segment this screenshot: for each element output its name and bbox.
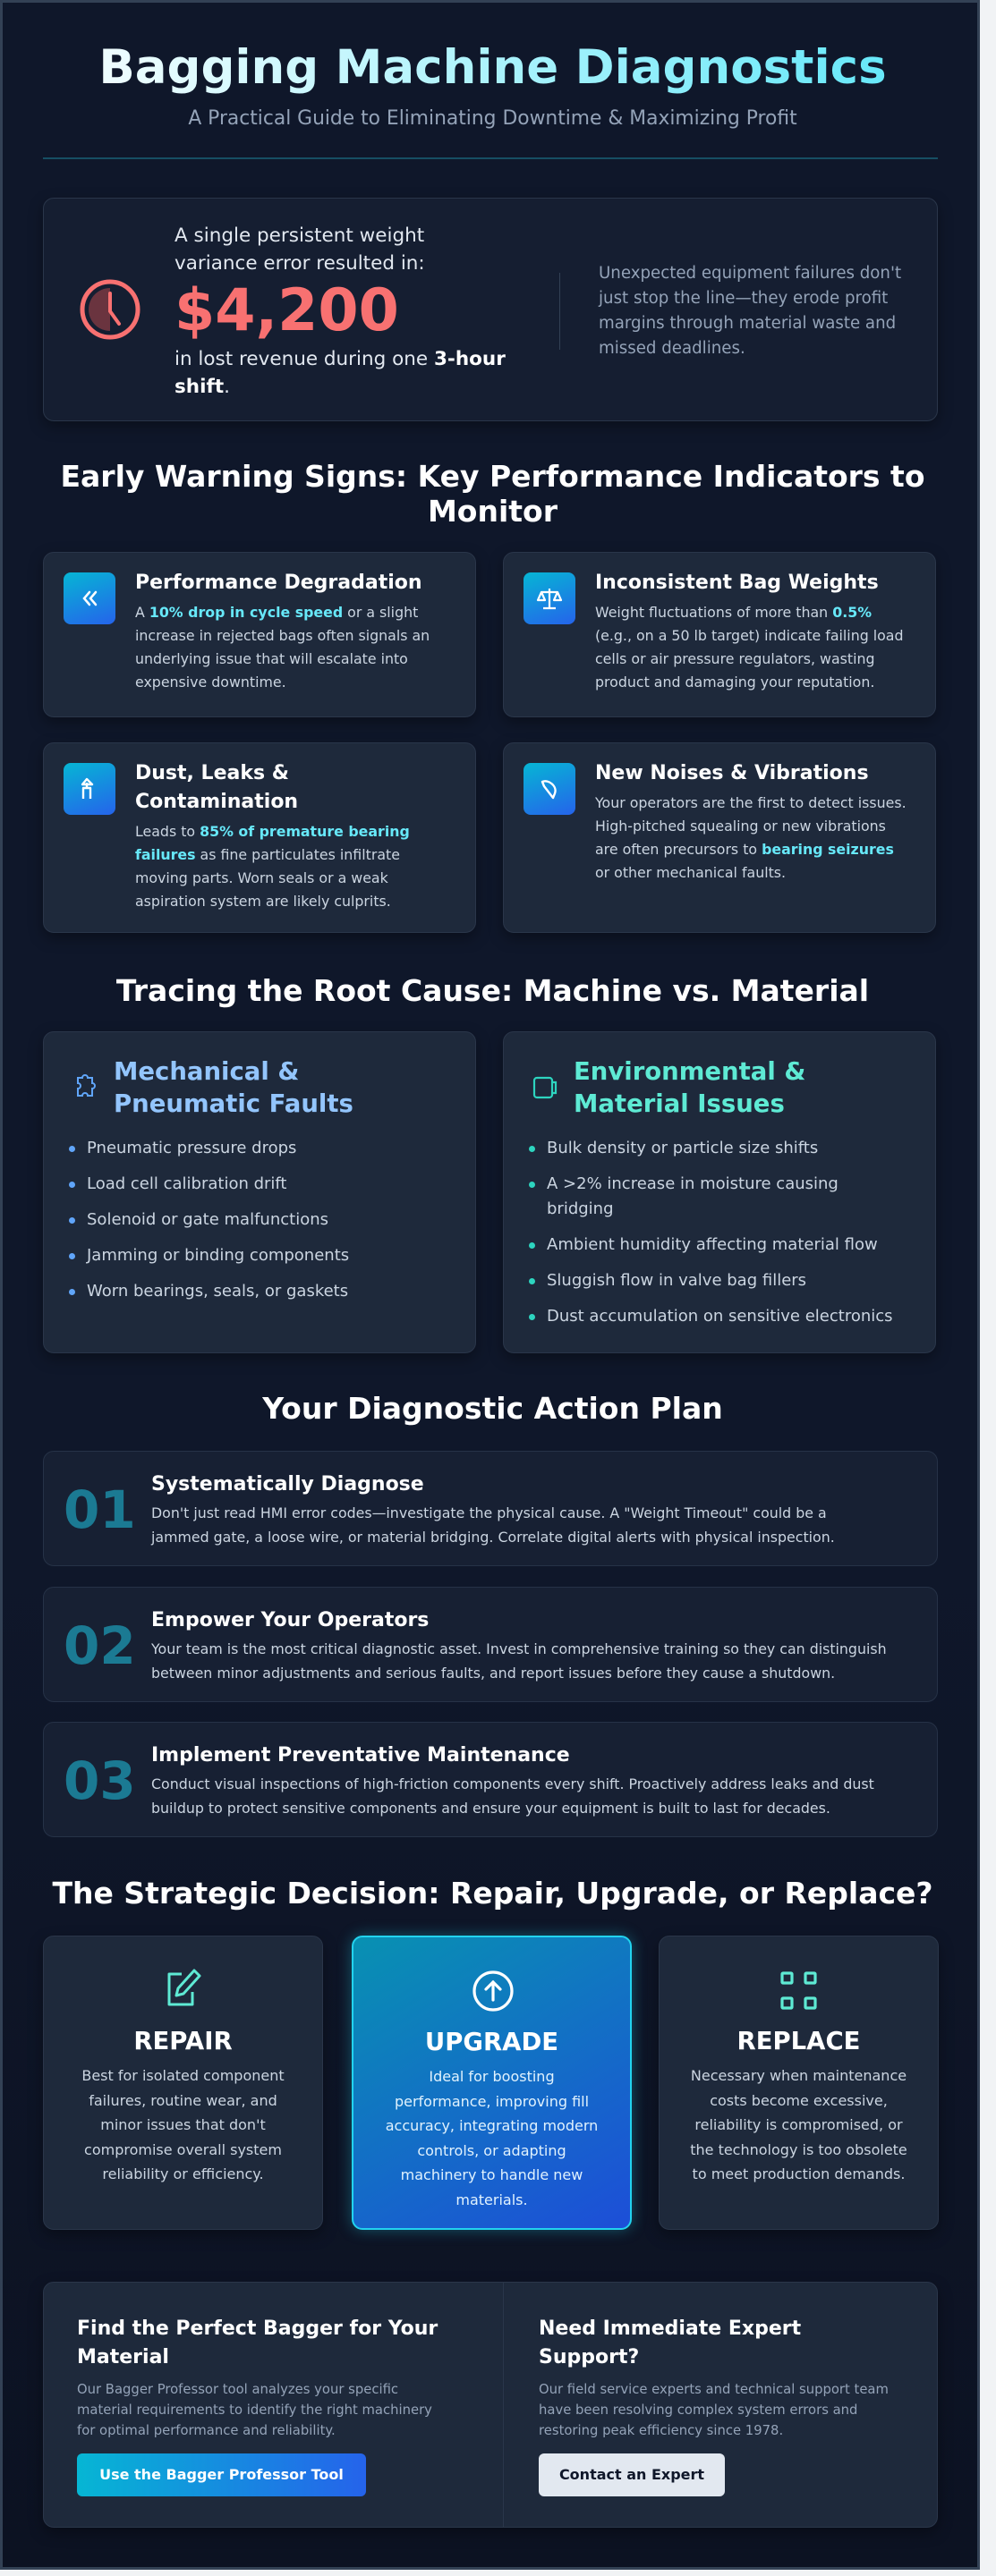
card: noises: New Noises & Vibrations — [595, 762, 869, 784]
list: Jamming or binding components — [87, 1246, 349, 1265]
card: upgrade — [352, 1936, 632, 2230]
card: performance degradation — [43, 552, 476, 717]
card: dust leaks: Dust, Leaks & — [135, 762, 289, 784]
list: Ambient humidity affecting material flow — [547, 1235, 878, 1254]
subtitle: A Practical Guide to Eliminating Downtime & Maximizing Profit — [188, 107, 797, 130]
button: Contact an Expert — [559, 2466, 704, 2483]
card: inconsistent weights: (e.g., on a 50 lb target) indicate failing load cells or air pressure regulators, wasting product and damaging your reputation. — [595, 627, 904, 691]
step 01: 01 — [64, 1479, 136, 1540]
title: Pneumatic Faults — [114, 1089, 353, 1118]
list: Load cell calibration drift — [87, 1174, 286, 1193]
card: replace: Necessary when maintenance costs become excessive, reliability is compromised, or the technology is too obsolete to meet production demands. — [690, 2067, 907, 2182]
panel: mechanical faults — [43, 1031, 476, 1353]
cta: bagger tool: Find the Perfect Bagger for Your Material — [77, 2318, 438, 2368]
step 03: Conduct visual inspections of high-friction components every shift. Proactively address leaks and dust buildup to protect sensitive components and ensure your equipment is built to last for decades. — [151, 1775, 874, 1817]
cta: expert: Our field service experts and technical support team have been resolving complex system errors and restoring peak efficiency since 1978. — [539, 2382, 889, 2438]
stat text — [175, 225, 506, 398]
list — [529, 1139, 893, 1326]
list: Worn bearings, seals, or gaskets — [87, 1282, 348, 1301]
icon: double chevron — [64, 572, 115, 624]
title — [574, 1057, 805, 1118]
icon: grid — [780, 1971, 817, 2010]
panel: call to action — [43, 2282, 938, 2528]
button — [539, 2453, 725, 2496]
card: noises — [503, 742, 936, 933]
title — [114, 1057, 353, 1118]
card: noises: Your operators are the first to detect issues. High-pitched squealing or new vibrations are often precursors to bearing seizures or other mechanical faults. — [595, 794, 907, 881]
stat text: $4,200 — [175, 277, 399, 344]
list: Solenoid or gate malfunctions — [87, 1210, 328, 1229]
stat text: A single persistent weight — [175, 225, 424, 247]
card: performance degradation: A 10% drop in cycle speed or a slight increase in rejected bags often signals an underlying issue that will escalate into expensive downtime. — [135, 604, 430, 691]
card: repair — [43, 1936, 323, 2230]
step 03: 03 — [64, 1750, 136, 1811]
step 01: jammed gate, a loose wire, or material bridging. Correlate digital alerts with physical inspection. — [151, 1529, 835, 1546]
heading: root cause: Tracing the Root Cause: Machine vs. Material — [116, 973, 869, 1008]
card: replace: REPLACE — [737, 2027, 860, 2055]
title: Environmental & — [574, 1057, 805, 1086]
cta: expert — [539, 2318, 889, 2496]
step 02 — [43, 1587, 938, 1702]
card: performance degradation: Performance Degradation — [135, 572, 422, 594]
icon: tablet — [533, 1077, 557, 1098]
card: dust leaks: Contamination — [135, 791, 298, 813]
card: repair: REPAIR — [133, 2027, 233, 2055]
step 03 — [43, 1722, 938, 1837]
icon: vibration — [524, 763, 575, 815]
stat text: variance error resulted in: — [175, 252, 425, 275]
step 03: Implement Preventative Maintenance — [151, 1744, 570, 1767]
button: Use the Bagger Professor Tool — [99, 2466, 344, 2483]
step 02: Empower Your Operators — [151, 1609, 429, 1631]
stat text: in lost revenue during one 3-hour shift. — [175, 348, 506, 398]
card: inconsistent weights: Inconsistent Bag Weights — [595, 572, 879, 594]
heading: early warning — [60, 459, 925, 529]
card: repair: Best for isolated component failures, routine wear, and minor issues that don't compromise overall system reliability or efficiency. — [81, 2067, 285, 2182]
button — [77, 2453, 366, 2496]
step 02: Your team is the most critical diagnostic asset. Invest in comprehensive training so they can distinguish between minor adjustments and serious faults, and report issues before they cause a shutdown. — [151, 1640, 887, 1682]
card: inconsistent weights — [503, 552, 936, 717]
step 01: Systematically Diagnose — [151, 1473, 424, 1496]
icon: puzzle — [77, 1074, 96, 1097]
title: Mechanical & — [114, 1057, 299, 1086]
text: context: Unexpected equipment failures don't just stop the line—they erode profit margins through material waste and missed deadlines. — [599, 264, 901, 358]
list: Bulk density or particle size shifts — [547, 1139, 818, 1157]
card: dust leaks: Leads to 85% of premature bearing failures as fine particulates infiltrate moving parts. Worn seals or a weak aspiration system are likely culprits. — [135, 823, 410, 910]
list: Pneumatic pressure drops — [87, 1139, 296, 1157]
card: replace — [659, 1936, 939, 2230]
card: dust leaks — [43, 742, 476, 933]
title: Bagging Machine Diagnostics — [98, 40, 887, 95]
card: inconsistent weights: Weight fluctuations of more than 0.5% — [595, 604, 872, 621]
cta: expert: Need Immediate Expert — [539, 2318, 801, 2340]
heading: early warning: Monitor — [428, 494, 558, 529]
list: A >2% increase in moisture causing bridging — [547, 1174, 839, 1218]
icon: clock — [81, 279, 140, 340]
panel: cost stat — [43, 198, 938, 421]
step 01 — [43, 1451, 938, 1566]
cta: bagger tool — [77, 2318, 438, 2496]
icon: up arrow — [472, 1970, 514, 2012]
card: upgrade: Ideal for boosting performance, improving fill accuracy, integrating modern controls, or adapting machinery to handle new materials. — [386, 2068, 598, 2207]
step 01: Don't just read HMI error codes—investigate the physical cause. A "Weight Timeout" could be a — [151, 1504, 827, 1521]
icon: edit — [168, 1969, 201, 2005]
list — [69, 1139, 349, 1301]
icon: scale — [524, 572, 575, 624]
heading: strategic decision: The Strategic Decision: Repair, Upgrade, or Replace? — [52, 1876, 933, 1911]
list: Dust accumulation on sensitive electronics — [547, 1307, 893, 1326]
icon: spray — [64, 763, 115, 815]
list: Sluggish flow in valve bag fillers — [547, 1271, 806, 1290]
step 02: 02 — [64, 1615, 136, 1676]
cta: expert: Support? — [539, 2346, 639, 2368]
panel: material issues — [503, 1031, 936, 1353]
heading: action plan: Your Diagnostic Action Plan — [262, 1391, 723, 1426]
cta: bagger tool: Our Bagger Professor tool analyzes your specific material requirements to identify the right machinery for optimal performance and reliability. — [77, 2382, 432, 2438]
heading: early warning: Early Warning Signs: Key Performance Indicators to — [60, 459, 925, 494]
title: Material Issues — [574, 1089, 785, 1118]
card: upgrade: UPGRADE — [425, 2028, 558, 2056]
